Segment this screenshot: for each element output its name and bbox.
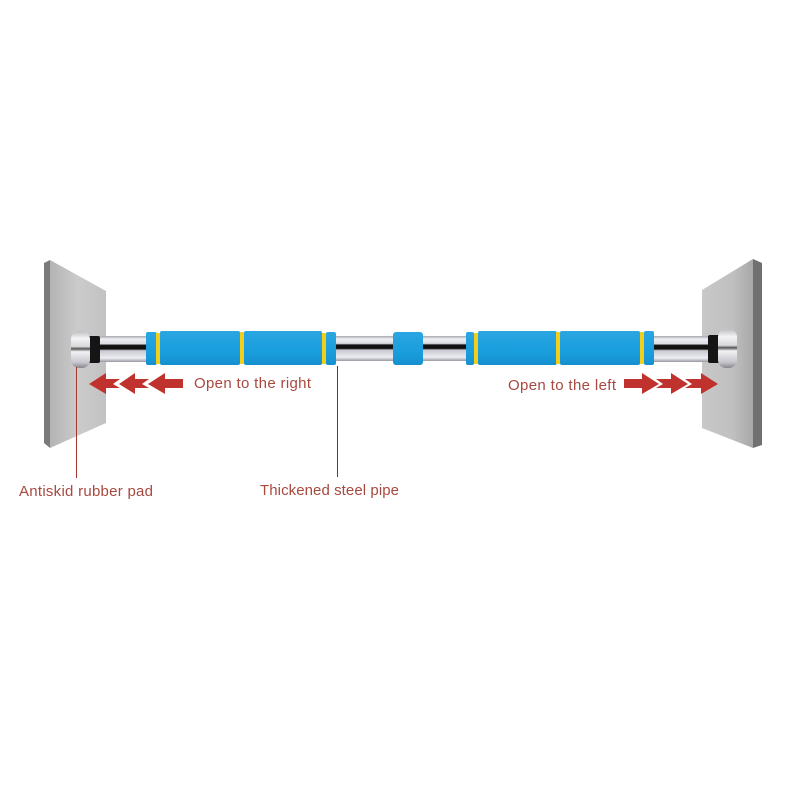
left rubber pad end cap — [71, 331, 100, 368]
steel pipe with black centre stripe — [98, 336, 710, 362]
label: open to the left: Open to the left — [508, 377, 617, 394]
leader line: rubber pad — [76, 367, 78, 478]
arrows pointing right — [624, 373, 718, 394]
leader line: steel pipe — [336, 366, 338, 477]
right wall panel — [702, 259, 762, 448]
centre blue foam sleeve — [393, 332, 423, 365]
right rubber pad end cap — [708, 329, 737, 368]
label: open to the right: Open to the right — [194, 375, 312, 392]
left blue foam grip — [146, 331, 336, 365]
left wall panel — [44, 260, 106, 448]
label: antiskid rubber pad: Antiskid rubber pad — [19, 483, 153, 500]
label: thickened steel pipe: Thickened steel pipe — [260, 482, 399, 499]
right blue foam grip — [466, 331, 654, 365]
arrows pointing left — [89, 373, 183, 394]
